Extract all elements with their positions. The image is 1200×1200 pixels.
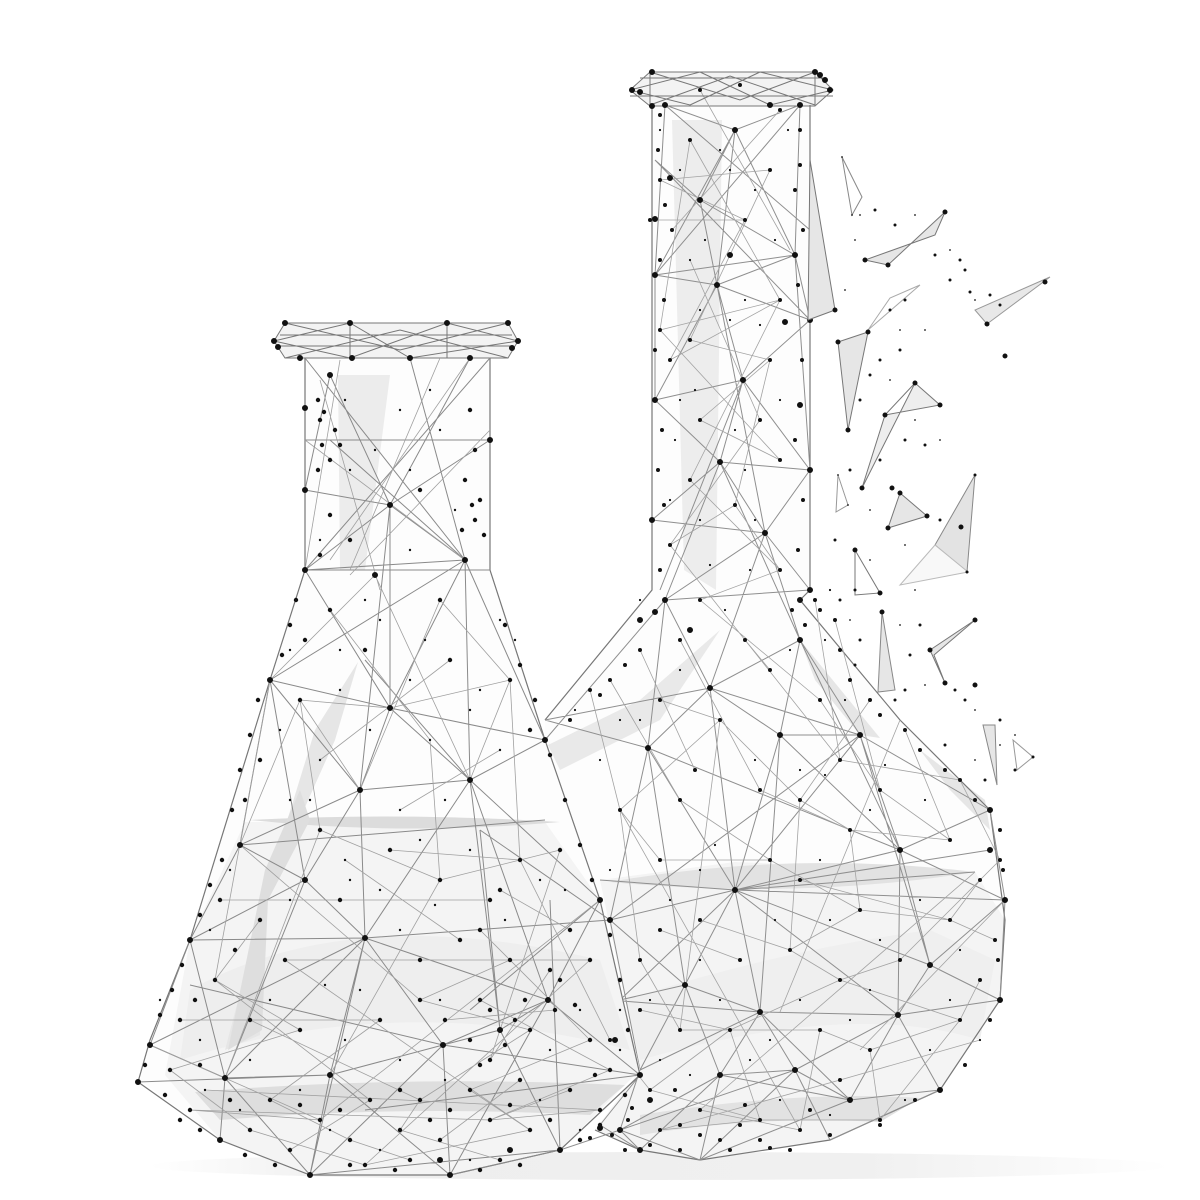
left flask dots — [138, 323, 640, 1175]
fragment: top winged triangle — [865, 212, 945, 265]
fragment: tall sliver beside neck — [808, 160, 835, 320]
debris dots — [835, 157, 1045, 780]
left flask outline — [138, 358, 640, 1175]
right flask secondary mesh — [590, 90, 1005, 1130]
fragment: mid sliver — [838, 332, 868, 430]
left rim — [274, 323, 518, 358]
fragment: faint long triangle — [900, 545, 968, 585]
fragment: outline triangle lower — [855, 550, 880, 595]
right flask liquid shading — [625, 930, 995, 1060]
left flask mesh — [138, 358, 640, 1175]
left flask liquid — [165, 822, 640, 1175]
left flask liquid surface — [250, 816, 560, 829]
fragment: bottom outline — [1013, 740, 1033, 770]
left body highlight — [225, 662, 358, 1050]
fragment: small outline triangle — [842, 157, 862, 215]
fragment: large triangle — [935, 475, 975, 572]
right rim — [630, 72, 833, 106]
left flask — [138, 323, 640, 1175]
right flask mesh — [545, 105, 1005, 1160]
right flask glass body — [545, 105, 1005, 1160]
right rim mesh — [630, 72, 833, 105]
right shoulder reflection — [800, 640, 880, 738]
debris fragments — [808, 157, 1050, 785]
right neck highlight — [672, 120, 722, 590]
fragment: small wing — [930, 620, 975, 683]
fragment: narrow sliver lower — [983, 725, 997, 785]
right side reflection — [920, 750, 990, 830]
left flask base shading — [195, 1081, 625, 1120]
left neck highlight — [338, 375, 390, 570]
left flask secondary mesh — [150, 358, 610, 1165]
right flask base shading — [640, 1096, 920, 1135]
fragment: small filled triangle — [888, 493, 927, 528]
fragment: tiny sliver — [836, 475, 848, 512]
right flask liquid surface — [610, 863, 975, 889]
fragment: kite — [862, 383, 940, 488]
right flask liquid — [595, 862, 1005, 1160]
fragment: right sliver — [975, 277, 1050, 324]
right flask dots — [570, 72, 1005, 1150]
left flask glass body — [140, 358, 640, 1175]
left rim mesh — [274, 323, 518, 358]
fragment: faint outline — [868, 285, 920, 330]
right shoulder highlight — [548, 630, 720, 770]
left flask liquid shading — [180, 936, 630, 1060]
right flask outline — [545, 105, 1005, 1160]
floor shadow — [150, 1152, 1170, 1180]
right flask — [545, 72, 1005, 1160]
left flask highlight lower band — [228, 790, 310, 1050]
fragment: spike — [878, 612, 895, 692]
